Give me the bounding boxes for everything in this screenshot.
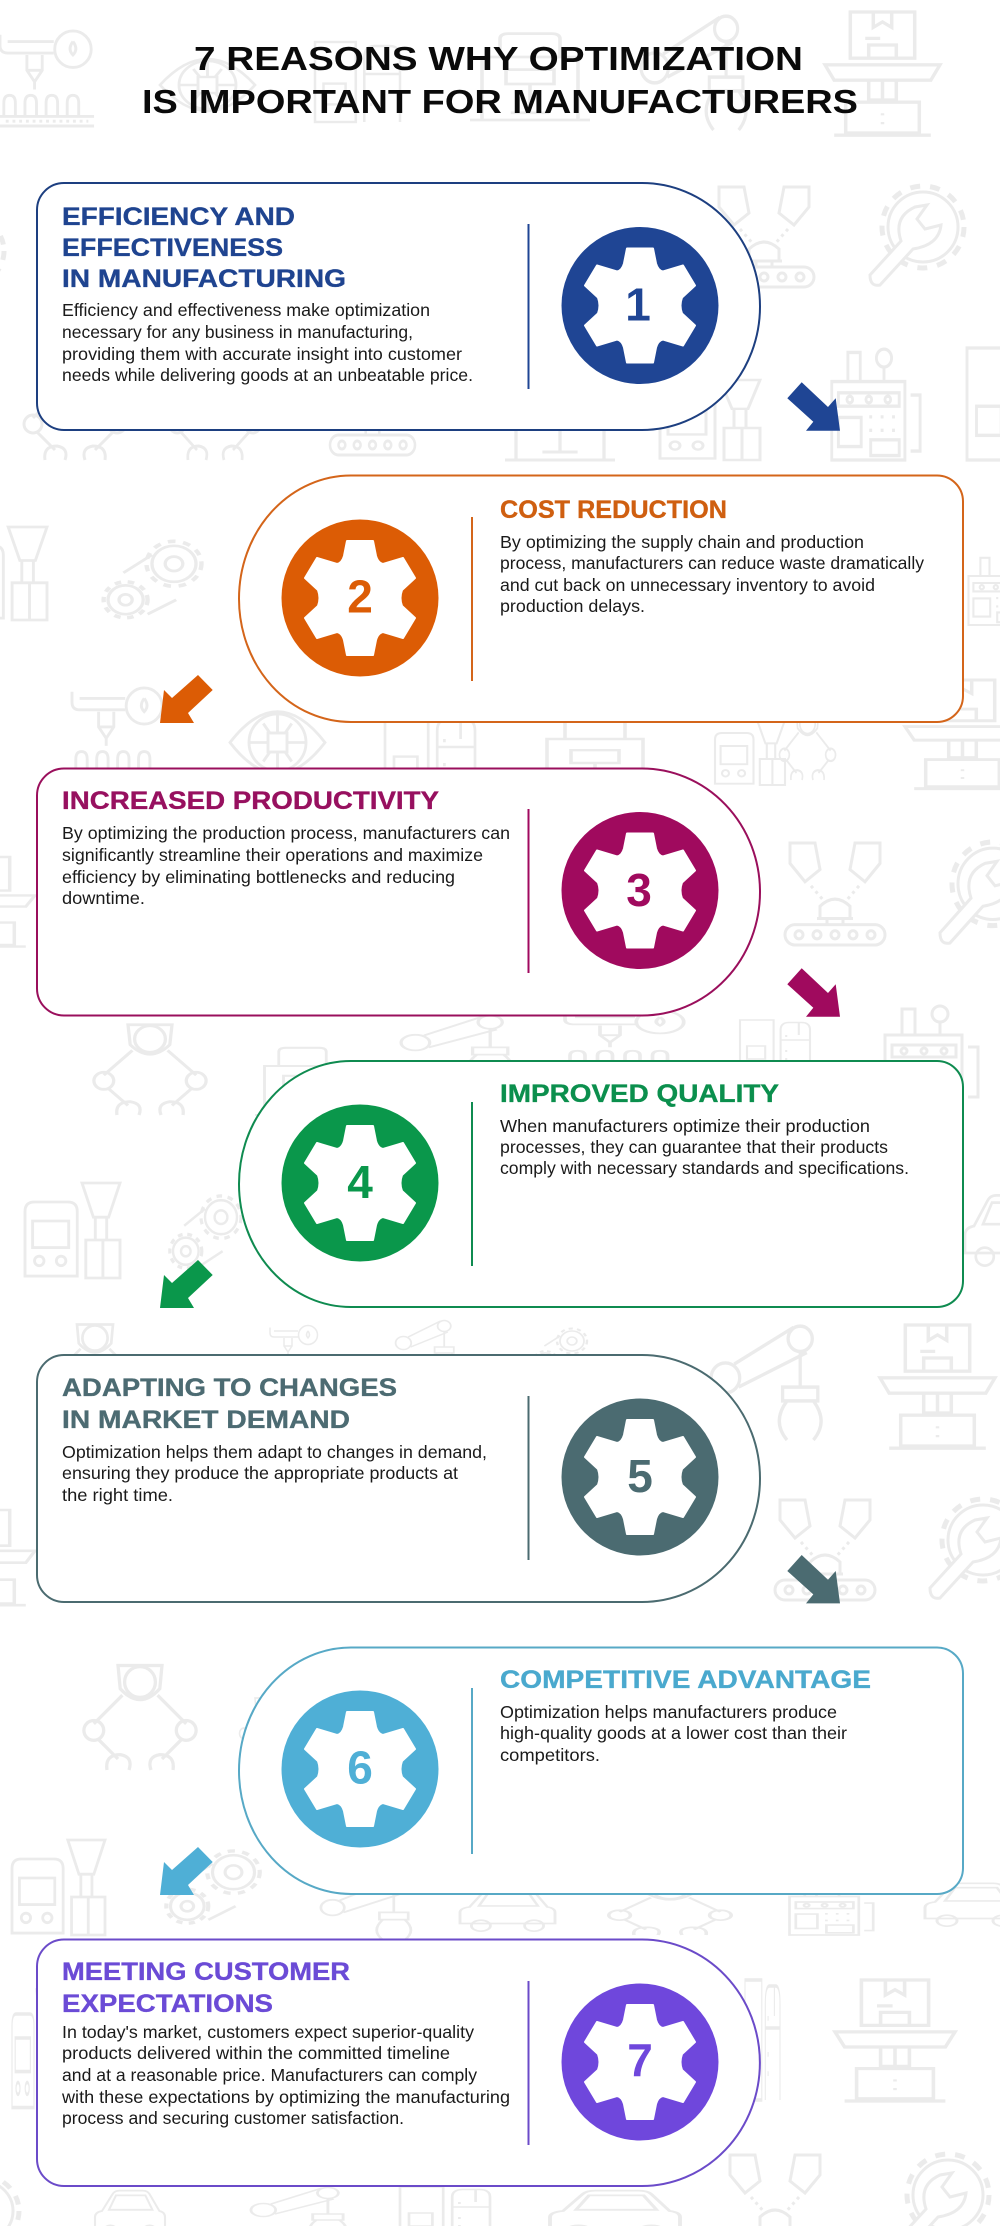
body text: ensuring they produce the appropriate products at: [62, 1463, 458, 1483]
title: [142, 40, 858, 120]
heading: IN MANUFACTURING: [62, 265, 346, 293]
heading: COMPETITIVE ADVANTAGE: [500, 1666, 871, 1694]
heading: [62, 1374, 397, 1434]
panel: reason 3 increased productivity: [37, 768, 760, 1016]
body text: high-quality goods at a lower cost than their: [500, 1723, 847, 1743]
icon: gear badge 3: [562, 812, 718, 969]
body text: and at a reasonable price. Manufacturers can comply: [62, 2065, 477, 2085]
icon: gear badge 1: [562, 227, 718, 384]
icon: gear badge 5: [562, 1398, 718, 1556]
body text: efficiency by eliminating bottlenecks and reducing: [62, 867, 455, 887]
arrow: card 6 to card 7: [160, 1847, 213, 1895]
panel: reason 5 adapting to changes in market demand: [37, 1355, 760, 1602]
arrow: card 2 to card 3: [160, 675, 213, 723]
body text: comply with necessary standards and specifications.: [500, 1158, 909, 1178]
panel: reason 4 improved quality: [239, 1061, 963, 1307]
body text: and cut back on unnecessary inventory to avoid: [500, 575, 875, 595]
card outline: [239, 476, 963, 722]
icon: gear badge 6: [282, 1690, 438, 1848]
body text: [62, 823, 510, 908]
heading: [62, 1958, 350, 2018]
body text: needs while delivering goods at an unbeatable price.: [62, 365, 473, 385]
body text: process and securing customer satisfaction.: [62, 2108, 404, 2128]
body text: In today's market, customers expect superior-quality: [62, 2022, 474, 2042]
title: 7 REASONS WHY OPTIMIZATION: [194, 40, 803, 77]
body text: Optimization helps them adapt to changes in demand,: [62, 1442, 487, 1462]
body text: necessary for any business in manufacturing,: [62, 322, 413, 342]
card outline: [37, 768, 760, 1016]
heading: IMPROVED QUALITY: [500, 1080, 779, 1108]
body text: [500, 1702, 847, 1765]
heading: MEETING CUSTOMER: [62, 1958, 350, 1986]
icon: gear badge 2: 2: [347, 570, 373, 622]
icon: gear badge 3: 3: [626, 864, 652, 916]
panel: reason 1 efficiency and effectiveness: [37, 183, 760, 430]
icon: gear badge 7: [562, 1984, 718, 2140]
icon: gear badge 6: 6: [347, 1742, 373, 1794]
heading: EFFECTIVENESS: [62, 234, 283, 262]
icon: gear badge 5: 5: [627, 1450, 653, 1502]
icon: gear badge 4: [282, 1104, 438, 1262]
body text: By optimizing the production process, manufacturers can: [62, 823, 510, 843]
body text: production delays.: [500, 596, 645, 616]
panel: reason 6 competitive advantage: [239, 1648, 963, 1894]
body text: competitors.: [500, 1745, 600, 1765]
heading: IN MARKET DEMAND: [62, 1406, 350, 1434]
body text: downtime.: [62, 888, 145, 908]
arrow: card 5 to card 6: [787, 1555, 840, 1603]
body text: significantly streamline their operations and maximize: [62, 845, 483, 865]
body text: the right time.: [62, 1485, 173, 1505]
body text: with these expectations by optimizing the manufacturing: [61, 2087, 510, 2107]
body text: [61, 2022, 510, 2128]
heading: EFFICIENCY AND: [62, 203, 295, 231]
heading: [62, 203, 346, 293]
body text: [500, 1116, 909, 1178]
arrow: card 3 to card 4: [787, 968, 840, 1017]
icon: gear badge 2: [282, 520, 438, 676]
body text: By optimizing the supply chain and production: [500, 532, 864, 552]
body text: When manufacturers optimize their production: [500, 1116, 870, 1136]
heading: INCREASED PRODUCTIVITY: [62, 787, 439, 815]
heading: EXPECTATIONS: [62, 1990, 273, 2018]
card outline: [37, 1940, 760, 2186]
card outline: [239, 1648, 963, 1894]
icon: gear badge 4: 4: [347, 1156, 373, 1208]
body text: processes, they can guarantee that their products: [500, 1137, 888, 1157]
body text: process, manufacturers can reduce waste dramatically: [500, 553, 924, 573]
title: IS IMPORTANT FOR MANUFACTURERS: [142, 83, 858, 120]
body text: products delivered within the committed timeline: [62, 2043, 450, 2063]
body text: [62, 300, 473, 385]
body text: Efficiency and effectiveness make optimization: [62, 300, 430, 320]
panel: reason 2 cost reduction: [239, 476, 963, 722]
icon: gear badge 7: 7: [627, 2034, 653, 2086]
body text: [500, 532, 924, 616]
body text: [62, 1442, 487, 1505]
heading: ADAPTING TO CHANGES: [62, 1374, 397, 1402]
card outline: [37, 183, 760, 430]
card outline: [239, 1061, 963, 1307]
card outline: [37, 1355, 760, 1602]
heading: COST REDUCTION: [500, 496, 727, 524]
panel: reason 7 meeting customer expectations: [37, 1940, 760, 2186]
arrow: card 4 to card 5: [160, 1260, 213, 1308]
arrow: card 1 to card 2: [787, 382, 840, 431]
body text: Optimization helps manufacturers produce: [500, 1702, 837, 1722]
icon: gear badge 1: 1: [625, 278, 651, 330]
body text: providing them with accurate insight into customer: [62, 344, 462, 364]
